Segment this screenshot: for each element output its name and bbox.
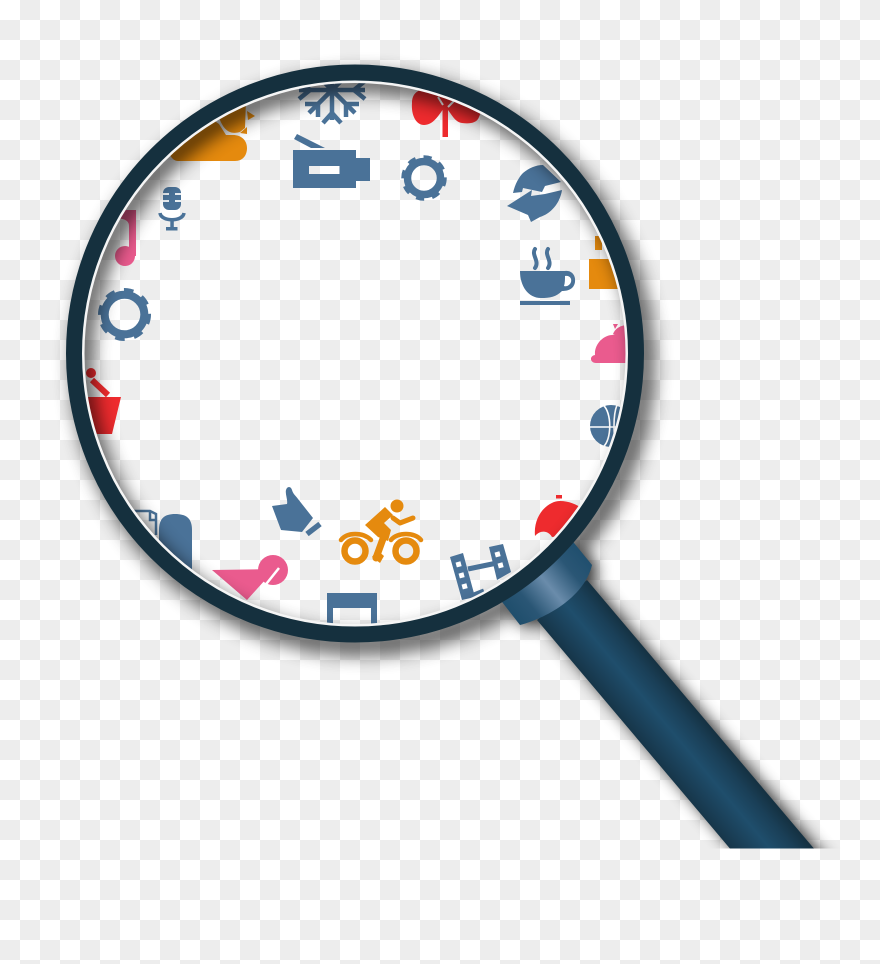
icon: pink cocktail xyxy=(212,555,288,600)
icon: refresh arrows xyxy=(507,165,562,222)
icon: snowflake xyxy=(298,83,366,124)
icon: orange cloud and sun xyxy=(170,106,255,161)
handle collar xyxy=(502,542,592,625)
icon: top gear xyxy=(403,157,445,199)
icon: blue bottles xyxy=(134,510,192,570)
icon: video camera xyxy=(293,134,370,188)
icon: microphone xyxy=(160,187,184,230)
icon: music note xyxy=(115,210,136,266)
icon: cyclist xyxy=(341,500,421,563)
dark lens ring xyxy=(74,72,636,634)
icon: red dome xyxy=(534,495,578,537)
icon: basketball xyxy=(590,405,620,447)
handle xyxy=(537,580,827,864)
icon: red bow xyxy=(412,90,480,137)
icon: red mortar and pestle xyxy=(86,368,121,434)
icon: blue table xyxy=(327,593,377,624)
magnifier body with shadows xyxy=(74,72,833,867)
white inner rim xyxy=(83,82,627,626)
ring shadow xyxy=(74,74,652,652)
icons inside lens xyxy=(80,60,632,630)
icon: coffee cup xyxy=(520,249,575,305)
icon: thumbs up xyxy=(272,487,320,534)
icon: orange gift xyxy=(589,236,618,289)
icon: film strip bridge xyxy=(450,544,511,600)
icon: pink cloud and sun xyxy=(591,324,626,363)
icon: left gear xyxy=(100,290,149,339)
handle shadow xyxy=(509,547,833,867)
